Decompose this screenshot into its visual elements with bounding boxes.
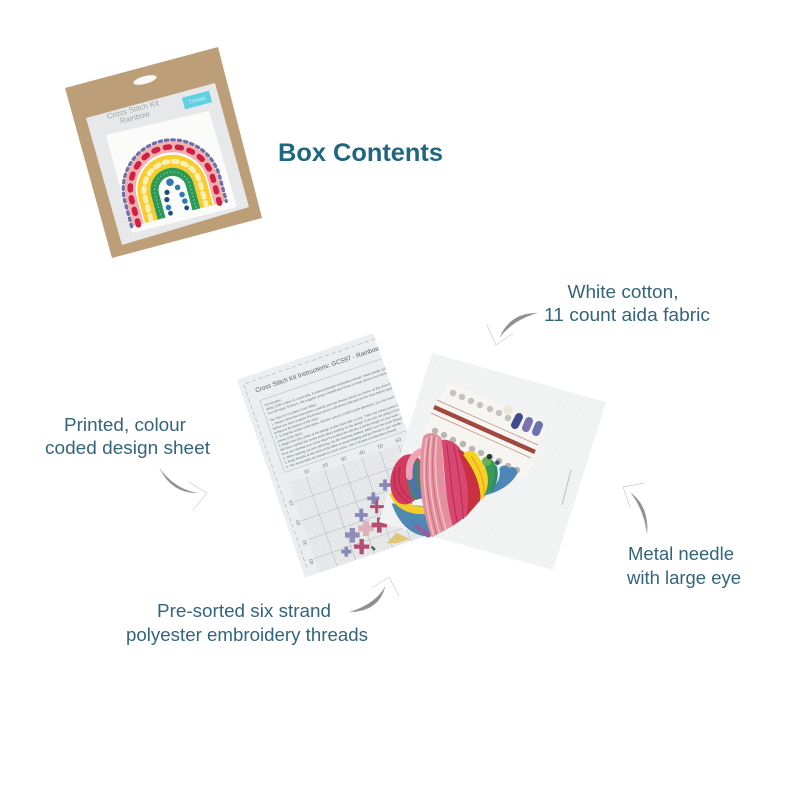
thread organiser card bbox=[425, 382, 547, 480]
label: needle: with large eye bbox=[626, 567, 741, 588]
chart axis numbers: 30 bbox=[302, 539, 309, 546]
purple tassels bbox=[515, 417, 539, 432]
chart axis numbers: 10 bbox=[303, 468, 311, 476]
arrow: threads bbox=[350, 577, 399, 612]
chart axis numbers: 50 bbox=[377, 443, 384, 451]
instruction text box: 6. This kit provides six strands for each colour. Use 2 strands of embroidery thread. bbox=[285, 427, 398, 469]
label: design sheet bbox=[45, 414, 210, 458]
label: design sheet: coded design sheet bbox=[45, 437, 210, 458]
product packet bbox=[65, 47, 262, 258]
white fabric panel bbox=[106, 111, 237, 233]
chart flower motifs bbox=[341, 479, 410, 557]
instruction text box: centre of the fabric. bbox=[277, 431, 304, 444]
cream knot bbox=[504, 406, 512, 414]
arrow: design sheet bbox=[160, 469, 207, 510]
hanging hole bbox=[132, 73, 158, 87]
instruction text box bbox=[260, 358, 407, 473]
instruction text box: 2. To find the centre of the fabric, fold the cartoon in half in both directions, you can mark it with bbox=[275, 392, 403, 439]
punched holes, top row bbox=[450, 390, 511, 421]
label: needle bbox=[626, 543, 741, 588]
instruction text box: have you stitched your cross stitch try to keep the stitches a similar length on your work. bbox=[281, 412, 400, 456]
yellow skein bbox=[389, 490, 425, 514]
chart axis numbers: 10 bbox=[288, 499, 296, 507]
chart axis numbers bbox=[288, 438, 401, 564]
instruction text box: Kit Includes: bbox=[264, 398, 282, 407]
instruction text box: 5. Keep threads at the back of the fabric to avoid tangling and get thread in your needle. bbox=[284, 421, 402, 465]
red hank bbox=[387, 451, 428, 507]
label: threads bbox=[126, 600, 368, 645]
chart axis numbers: 40 bbox=[308, 558, 316, 565]
instruction text box: 3. Begin from the centre of the design on the chart with a cross. There are centre points to help you. bbox=[278, 398, 412, 448]
blue skein right bbox=[485, 465, 517, 495]
label: needle: Metal needle bbox=[628, 543, 734, 564]
blue skein bbox=[392, 503, 430, 537]
sheet heading: Cross Stitch Kit Instructions: GCS97 - Rainbow bbox=[254, 345, 381, 394]
red stripes bbox=[434, 407, 535, 452]
chart axis numbers: 20 bbox=[295, 519, 303, 526]
chart grid bbox=[288, 444, 424, 572]
title: Box Contents bbox=[278, 139, 443, 167]
instruction text box: Top Tips For Counted Cross Stitch: bbox=[269, 402, 317, 422]
label: threads: polyester embroidery threads bbox=[126, 624, 368, 645]
packet title: Cross Stitch Kit bbox=[106, 98, 161, 121]
instruction text box: printed at the bottom of the chart. bbox=[274, 416, 320, 435]
dashed crop lines bbox=[244, 338, 375, 568]
label: white cotton bbox=[544, 281, 710, 325]
design sheet bbox=[237, 333, 425, 578]
instruction text box: 4. When starting out your stitching, use the finishing method. Stitch over the loose thread end. bbox=[283, 414, 409, 461]
inner threads core bbox=[408, 460, 424, 500]
clear grey sleeve bbox=[86, 83, 249, 245]
embroidery thread skeins bbox=[387, 433, 517, 537]
instruction text box: before you start compare the thread colours with those indicated on the chart before starting. bbox=[272, 385, 397, 431]
yellow skein right bbox=[463, 451, 490, 501]
kraft backing card bbox=[65, 47, 262, 258]
aida fabric bbox=[379, 353, 606, 570]
chart axis numbers: 20 bbox=[322, 462, 329, 470]
rainbow design bbox=[112, 129, 226, 227]
punched holes, bottom row bbox=[432, 428, 520, 473]
chart axis numbers: 30 bbox=[340, 456, 348, 463]
label: white cotton: 11 count aida fabric bbox=[544, 304, 710, 325]
sheet paper bbox=[237, 333, 441, 578]
arrow: white cotton bbox=[487, 313, 537, 345]
label: design sheet: Printed, colour bbox=[64, 414, 186, 435]
needle bbox=[562, 470, 571, 505]
red skein bbox=[457, 450, 481, 517]
arrow: needle bbox=[623, 483, 647, 533]
instruction text box: You will need: Scissors. We suggest using a needlework frame to keep secure your fabric. bbox=[267, 371, 388, 416]
dark pink skein bbox=[442, 440, 468, 526]
chart axis numbers: 60 bbox=[395, 437, 402, 444]
instruction text box: White 100% cotton 11 count aida, 6 strand polyester embroidery thread, metal needle, full colour chart. bbox=[266, 361, 404, 411]
instruction text box: 1. Please follow the instructions carefully and use thread colours as shown on the chart by using bbox=[271, 379, 400, 427]
label: threads: Pre-sorted six strand bbox=[157, 600, 331, 621]
chart axis numbers: 40 bbox=[358, 449, 366, 457]
label: white cotton: White cotton, bbox=[568, 281, 678, 302]
pale pink skein bbox=[420, 433, 453, 537]
blue brand tag: Trimits bbox=[188, 96, 207, 106]
green skein bbox=[482, 458, 496, 496]
blue brand tag bbox=[182, 91, 212, 109]
packet title: Rainbow bbox=[119, 109, 151, 126]
instruction text box: We have marked the centre point when working on the design. If you are not using a frame, stitch bbox=[280, 404, 411, 452]
